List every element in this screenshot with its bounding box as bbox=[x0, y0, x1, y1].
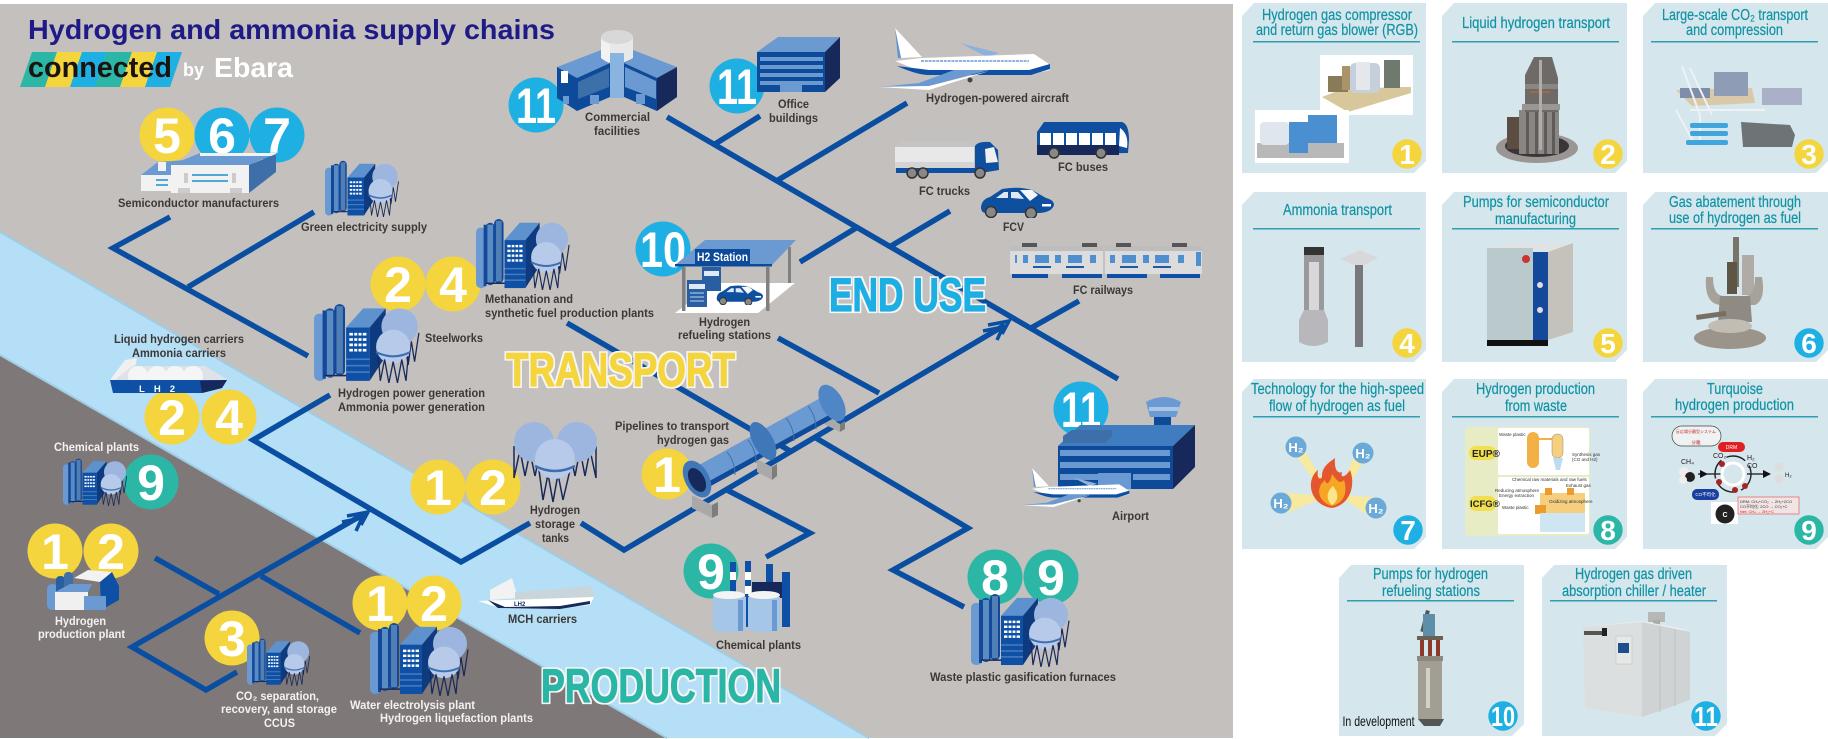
badge 2: 2 bbox=[1600, 139, 1616, 170]
map labels: Hydrogen bbox=[699, 317, 750, 329]
panel 6 heading: Gas abatement through bbox=[1669, 194, 1801, 211]
map labels: FC buses bbox=[1058, 162, 1108, 174]
map labels: CCUS bbox=[264, 718, 295, 730]
panel 1 heading bbox=[1253, 7, 1420, 42]
map labels: FC railways bbox=[1073, 285, 1133, 297]
map labels: buildings bbox=[769, 113, 818, 125]
map labels bbox=[38, 93, 1149, 730]
logo: connected by Ebara: connected bbox=[28, 52, 172, 84]
panel 8 process diagram: Chemical raw materials and raw fuels bbox=[1512, 477, 1588, 482]
panel 7 flame diagram: H₂ bbox=[1288, 440, 1304, 455]
icon: MCH carrier ship bbox=[478, 578, 594, 609]
panel 7 heading: flow of hydrogen as fuel bbox=[1269, 398, 1405, 415]
map labels: Liquid hydrogen carriers bbox=[114, 334, 244, 346]
panel 3 plant picture bbox=[1676, 66, 1802, 147]
map labels: CO₂ separation, bbox=[236, 691, 319, 703]
badge 3 bbox=[1794, 139, 1824, 170]
badges: map numbers: 9 bbox=[137, 455, 165, 511]
panel 7 flame diagram: H₂ bbox=[1368, 501, 1384, 516]
panel 9 reaction diagram: H₂ bbox=[1785, 473, 1792, 479]
map labels: Pipelines to transport bbox=[615, 421, 729, 433]
panel 5 heading bbox=[1452, 194, 1619, 230]
panel 4 heading: Ammonia transport bbox=[1283, 202, 1393, 219]
panel 8 process diagram: Oxidizing atmosphere bbox=[1549, 499, 1593, 504]
note: in development: In development bbox=[1342, 713, 1415, 729]
panel 4 pump pictures bbox=[1299, 247, 1378, 347]
panel 1: compressor and blower bbox=[1242, 3, 1426, 173]
icon: hydrogen storage tanks bbox=[514, 422, 597, 502]
icon: hydrogen station: H2 Station bbox=[697, 250, 748, 264]
panel 9 heading bbox=[1651, 381, 1818, 418]
map labels: Office bbox=[778, 99, 809, 111]
panel 7: high-speed flow of hydrogen bbox=[1242, 379, 1426, 549]
map labels: FC trucks bbox=[919, 186, 970, 198]
panel 3 heading bbox=[1651, 7, 1818, 42]
icon: MCH carrier ship: LH2 bbox=[514, 602, 526, 608]
panel 2 pump picture bbox=[1496, 57, 1578, 163]
badges: map numbers: 2 bbox=[479, 460, 507, 516]
map labels: facilities bbox=[594, 126, 640, 138]
panel 8 process diagram: ICFG® bbox=[1470, 499, 1500, 510]
panel 11: absorption chiller / heater bbox=[1542, 565, 1727, 736]
panel 9: turquoise hydrogen production bbox=[1643, 379, 1828, 549]
icon: hydrogen station bbox=[675, 240, 796, 313]
icon: commercial facility bbox=[557, 30, 677, 111]
panel 3 heading: and compression bbox=[1686, 22, 1783, 39]
icon: FC truck bbox=[895, 141, 999, 178]
icon: LH2 carrier ship bbox=[110, 358, 228, 395]
badges: map numbers: 4 bbox=[215, 390, 243, 446]
badge 2 bbox=[1593, 139, 1623, 170]
badge 6 bbox=[1794, 328, 1824, 359]
badges: map numbers: 2 bbox=[158, 390, 186, 446]
badge 8: 8 bbox=[1600, 515, 1616, 546]
badges: map numbers: 11 bbox=[1061, 382, 1101, 438]
badge 3: 3 bbox=[1801, 139, 1817, 170]
panel 7 flame diagram bbox=[1270, 436, 1386, 518]
icon: water electrolysis plant bbox=[370, 623, 468, 696]
badges: map numbers: 11 bbox=[717, 59, 757, 115]
badge 10: 10 bbox=[1491, 701, 1515, 732]
panel 5 heading: Pumps for semiconductor bbox=[1463, 194, 1609, 211]
panel 9 heading: hydrogen production bbox=[1675, 397, 1794, 414]
panel 7 heading: Technology for the high-speed bbox=[1251, 381, 1424, 398]
panel 8 process diagram: EUP® bbox=[1472, 449, 1501, 460]
panel 8 heading: from waste bbox=[1505, 398, 1567, 415]
arrow: transport to end use bbox=[983, 321, 1009, 340]
map labels: Steelworks bbox=[425, 333, 483, 345]
panel: supply chain map background bbox=[0, 4, 1233, 738]
badges: map numbers: 2 bbox=[420, 576, 448, 632]
badge 11: 11 bbox=[1694, 701, 1718, 732]
badge 5 bbox=[1593, 328, 1623, 359]
panel 9 reaction diagram: DRM bbox=[1726, 445, 1737, 451]
pipeline network bbox=[113, 103, 1118, 690]
panel 4: ammonia transport bbox=[1242, 192, 1426, 362]
panel 8 process diagram: Reducing atmosphere bbox=[1495, 488, 1540, 493]
map labels: synthetic fuel production plants bbox=[485, 308, 654, 320]
panel 8 heading: Hydrogen production bbox=[1476, 381, 1595, 398]
panel 11 heading bbox=[1550, 566, 1717, 602]
badges: map numbers: 1 bbox=[366, 576, 394, 632]
badge 8 bbox=[1593, 515, 1623, 546]
map labels: recovery, and storage bbox=[221, 704, 337, 716]
badge 6: 6 bbox=[1801, 328, 1817, 359]
panel 6: gas abatement bbox=[1643, 192, 1828, 362]
badge 9: 9 bbox=[1801, 515, 1817, 546]
stage label: PRODUCTION: PRODUCTION bbox=[541, 659, 781, 712]
map labels: storage bbox=[535, 519, 575, 531]
panel 9 heading: Turquoise bbox=[1707, 381, 1763, 398]
panel 11 heading: Hydrogen gas driven bbox=[1575, 566, 1692, 583]
map labels: Ammonia carriers bbox=[132, 348, 226, 360]
badges: map numbers: 8 bbox=[981, 550, 1009, 606]
panel 6 heading bbox=[1651, 194, 1818, 230]
map labels: Hydrogen power generation bbox=[338, 388, 485, 400]
map labels: Hydrogen liquefaction plants bbox=[380, 713, 533, 725]
panel 8 process diagram: Waste plastic bbox=[1502, 505, 1529, 510]
icon: LH2 carrier ship: LH2 bbox=[139, 384, 175, 395]
badges: map numbers: 7 bbox=[263, 108, 291, 164]
icon: green electricity plant bbox=[325, 161, 398, 217]
icon: FCV car bbox=[981, 188, 1054, 218]
map labels: Waste plastic gasification furnaces bbox=[930, 672, 1116, 684]
panel 6 heading: use of hydrogen as fuel bbox=[1669, 210, 1801, 227]
badges: map numbers: 2 bbox=[97, 524, 125, 580]
stage label: END USE: END USE bbox=[829, 268, 986, 321]
arrow: production to transport bbox=[342, 512, 368, 531]
panel 10 heading: refueling stations bbox=[1382, 583, 1480, 600]
panel 8 heading bbox=[1452, 381, 1619, 418]
icon: FC bus bbox=[1037, 122, 1129, 158]
badge 4: 4 bbox=[1399, 328, 1415, 359]
icon: semiconductor factory bbox=[141, 153, 276, 193]
map labels: refueling stations bbox=[678, 330, 771, 342]
map labels: production plant bbox=[38, 629, 125, 641]
map labels: Water electrolysis plant bbox=[350, 700, 475, 712]
map labels: Hydrogen bbox=[530, 505, 580, 517]
panel 9 reaction diagram: CO不均化: 2CO → CO₂+C bbox=[1740, 503, 1788, 509]
panel 9 reaction diagram: CO bbox=[1747, 463, 1758, 470]
icon: office building bbox=[757, 37, 840, 92]
badges: map numbers: 5 bbox=[153, 108, 181, 164]
map labels: FCV bbox=[1003, 222, 1024, 234]
badges: map numbers: 1 bbox=[424, 460, 452, 516]
logo: connected by Ebara: Ebara bbox=[214, 52, 293, 83]
panel 9 reaction diagram bbox=[1672, 426, 1799, 524]
panel 10: pumps for hydrogen refueling stations bbox=[1339, 565, 1524, 736]
logo: connected by Ebara bbox=[20, 52, 293, 87]
icon: CCUS plant bbox=[247, 639, 310, 686]
badges: map numbers: 9 bbox=[697, 544, 725, 600]
panel 9 reaction diagram: Net: CH₄ → 2H₂+C bbox=[1740, 509, 1774, 514]
panel 9 reaction diagram: CO₂ bbox=[1713, 453, 1726, 460]
panel 11 heading: absorption chiller / heater bbox=[1562, 583, 1706, 600]
icon: FC railway train bbox=[1010, 243, 1202, 278]
map labels: Semiconductor manufacturers bbox=[118, 198, 279, 210]
panel 9 reaction diagram: C bbox=[1722, 512, 1728, 519]
map labels: Methanation and bbox=[485, 294, 573, 306]
badges: map numbers bbox=[28, 58, 1108, 667]
icon: hydrogen production plant bbox=[47, 570, 119, 610]
badges: map numbers: 10 bbox=[640, 222, 686, 278]
badge 5: 5 bbox=[1600, 328, 1616, 359]
panel 10 heading bbox=[1347, 566, 1514, 602]
panel 8: hydrogen production from waste bbox=[1442, 379, 1627, 549]
badges: map numbers: 6 bbox=[208, 108, 236, 164]
badges: map numbers: 9 bbox=[1037, 550, 1065, 606]
map labels: Hydrogen-powered aircraft bbox=[926, 93, 1069, 105]
title: Hydrogen and ammonia supply chains bbox=[28, 14, 555, 45]
badge 7 bbox=[1393, 515, 1423, 546]
badge 7: 7 bbox=[1400, 515, 1416, 546]
badges: map numbers: 1 bbox=[653, 447, 681, 503]
map labels: Chemical plants bbox=[716, 640, 801, 652]
icon: methanation plant bbox=[476, 219, 569, 290]
map labels: Airport bbox=[1112, 511, 1149, 523]
panel 8 process diagram: Energy extraction bbox=[1499, 493, 1535, 498]
panel 5 heading: manufacturing bbox=[1495, 211, 1576, 228]
panel 1 heading: Hydrogen gas compressor bbox=[1262, 7, 1412, 24]
panel 9 reaction diagram: 分離 bbox=[1692, 439, 1701, 446]
badge 1 bbox=[1392, 139, 1422, 170]
map labels: hydrogen gas bbox=[657, 435, 729, 447]
panel 7 flame diagram: H₂ bbox=[1355, 446, 1371, 461]
icon: airport plane bbox=[1022, 468, 1129, 507]
panel 11 chiller picture bbox=[1583, 612, 1690, 717]
badges: map numbers: 2 bbox=[384, 257, 412, 313]
badges: map numbers: 3 bbox=[218, 611, 246, 667]
icon: hydrogen pipeline bbox=[677, 380, 851, 518]
map labels: Commercial bbox=[585, 112, 650, 124]
stage label: TRANSPORT: TRANSPORT bbox=[506, 343, 735, 396]
map labels: Hydrogen bbox=[55, 616, 106, 628]
panel 10 heading: Pumps for hydrogen bbox=[1373, 566, 1488, 583]
panel 8 process diagram: Waste plastic bbox=[1499, 432, 1526, 437]
icon: steelworks / power generation plant bbox=[314, 304, 419, 383]
panel 7 heading bbox=[1251, 381, 1424, 418]
map labels: Green electricity supply bbox=[301, 222, 428, 234]
panel 2 heading: Liquid hydrogen transport bbox=[1462, 15, 1611, 32]
map labels: MCH carriers bbox=[508, 614, 577, 626]
panel 8 process diagram: Exhaust gas bbox=[1566, 483, 1592, 488]
panel 1 machinery pictures bbox=[1255, 55, 1413, 163]
panel 3: CO2 transport and compression bbox=[1643, 3, 1828, 173]
panel 6 machine picture bbox=[1694, 237, 1766, 349]
icon: chemical plant in production zone bbox=[63, 459, 127, 506]
badge 1: 1 bbox=[1399, 139, 1415, 170]
badges: map numbers: 1 bbox=[41, 524, 69, 580]
icon: airport bbox=[1058, 397, 1195, 489]
badge 4 bbox=[1392, 328, 1422, 359]
panel 7 flame diagram: H₂ bbox=[1273, 496, 1289, 511]
panel 5: pumps for semiconductor manufacturing bbox=[1442, 192, 1627, 362]
panel 9 reaction diagram: H₂ bbox=[1747, 455, 1755, 462]
panel 8 process diagram: Synthesis gas bbox=[1572, 452, 1601, 457]
panel 9 reaction diagram: CO不均化 bbox=[1695, 491, 1716, 498]
panel 8 process diagram: (CO and H2) bbox=[1572, 457, 1598, 462]
icon: chemical plant in transport zone bbox=[713, 561, 790, 632]
badges: map numbers: 11 bbox=[516, 78, 556, 134]
panel 9 reaction diagram: DRM: CH₄+CO₂ → 2H₂+2CO bbox=[1740, 499, 1792, 504]
icon: waste plastic gasification plant bbox=[971, 594, 1069, 667]
panel 9 reaction diagram: CH₄ bbox=[1681, 459, 1694, 466]
panel 5 pump picture bbox=[1487, 243, 1573, 346]
logo: connected by Ebara: by bbox=[183, 60, 204, 80]
map labels: tanks bbox=[542, 533, 569, 545]
map labels: Ammonia power generation bbox=[338, 402, 485, 414]
panel 9 reaction diagram: 反応場分離型システム bbox=[1676, 428, 1716, 434]
panel 8 process diagram bbox=[1465, 427, 1601, 536]
icon: hydrogen aircraft bbox=[879, 28, 1050, 90]
panel 2: liquid hydrogen transport bbox=[1442, 3, 1627, 173]
panel 1 heading: and return gas blower (RGB) bbox=[1256, 22, 1418, 39]
badge 9 bbox=[1794, 515, 1824, 546]
badges: map numbers: 4 bbox=[439, 257, 467, 313]
panel 10 pump picture bbox=[1417, 610, 1444, 726]
map labels: Chemical plants bbox=[54, 442, 139, 454]
